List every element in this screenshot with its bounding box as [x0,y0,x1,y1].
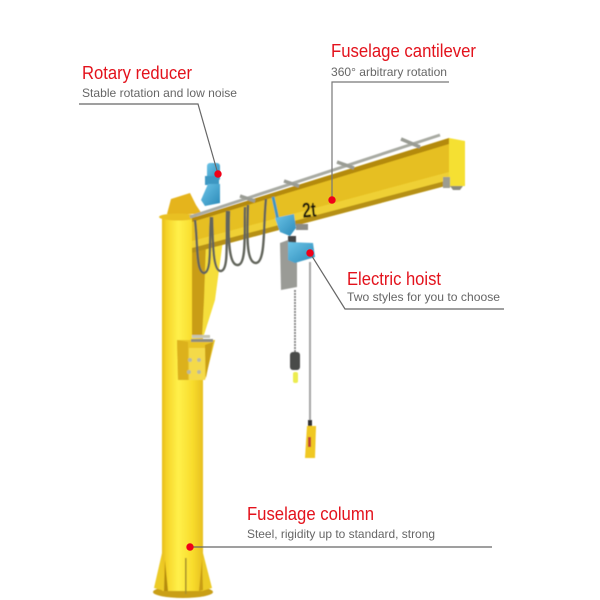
rotary reducer motor [201,163,220,206]
callout: rotary reducer [79,63,237,178]
callout: fuselage column: Steel, rigidity up to standard, strong [247,527,435,541]
festoon cables [195,199,266,273]
flange bracket [177,335,215,380]
cantilever beam [192,138,465,253]
callout: fuselage cantilever: Fuselage cantilever [331,41,476,61]
callout: electric hoist: Two styles for you to choose [347,290,500,304]
top gusset [167,193,202,214]
column base with ribs [153,553,213,598]
festoon rail [190,135,440,217]
callout: electric hoist [306,249,504,309]
callout: fuselage cantilever: 360° arbitrary rotation [331,65,447,79]
callout: rotary reducer: Stable rotation and low noise [82,86,237,100]
capacity mark: 2t [301,198,317,223]
column [159,214,203,569]
callout: fuselage column: Fuselage column [247,504,374,524]
electric hoist [273,197,316,458]
callout: fuselage column [186,504,492,551]
crane illustration [153,135,465,598]
callout: rotary reducer: Rotary reducer [82,63,192,83]
beam end plate [449,138,465,187]
strut under beam [192,240,223,338]
callout: electric hoist: Electric hoist [347,269,441,289]
callout: fuselage cantilever [328,41,476,204]
